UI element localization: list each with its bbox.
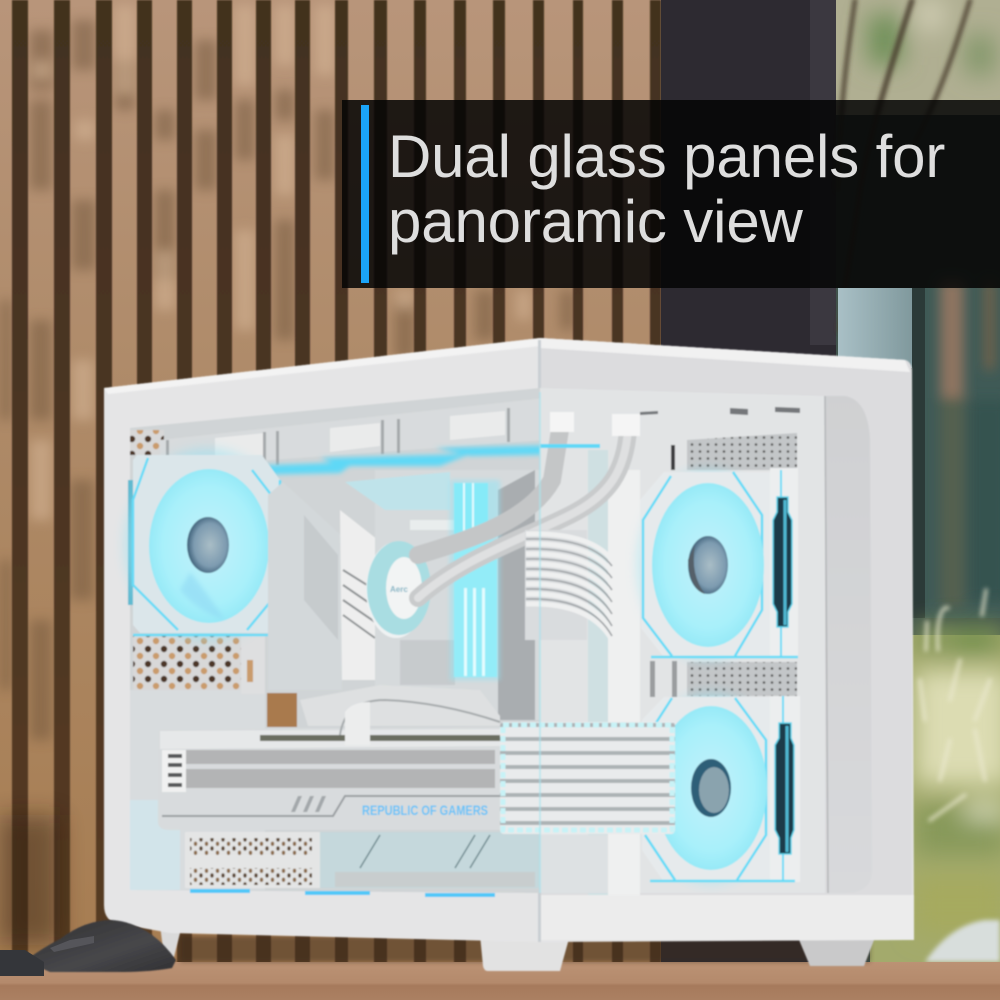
background: dark column — [661, 0, 838, 965]
headline — [388, 123, 945, 255]
front-right fan lower — [641, 693, 800, 883]
PSU-side cable bundle — [525, 530, 612, 640]
left window interior — [130, 388, 540, 893]
top fan row with blue glow — [160, 398, 600, 475]
accent bar — [361, 105, 369, 283]
RGB strip handles — [773, 470, 794, 880]
glass corner highlight — [539, 392, 541, 893]
rear perforated grills — [650, 433, 797, 697]
expansion slots under GPU — [185, 832, 608, 893]
AIO pump block: Aerc — [390, 585, 408, 594]
side inner panel — [825, 396, 872, 893]
left intake fan — [125, 449, 289, 641]
front-right fan top — [638, 468, 798, 660]
AIO tubes — [418, 412, 640, 598]
graphics card: REPUBLIC OF GAMERS — [362, 802, 488, 818]
table top — [0, 962, 1000, 1000]
case feet — [160, 925, 876, 971]
headline: Dual glass panels for — [388, 123, 945, 190]
right window interior — [540, 388, 825, 895]
PC case body — [104, 338, 914, 942]
RAM sticks with cyan glow — [450, 480, 500, 680]
CPU shroud panel — [268, 482, 378, 690]
background: grass and shrubs — [870, 590, 1000, 965]
bottom cyan light strips — [190, 889, 495, 897]
caption banner — [342, 100, 1000, 288]
background: wood slat wall — [0, 0, 662, 1000]
GPU end cap with LED dots — [500, 722, 675, 834]
motherboard — [300, 470, 540, 726]
keyboard corner — [0, 950, 44, 976]
AIO pump block — [366, 541, 431, 638]
shadow under case — [180, 936, 870, 962]
graphics card — [158, 700, 503, 830]
headline: panoramic view — [388, 188, 803, 255]
wireless mouse — [25, 920, 176, 972]
background: blurred garden through window — [836, 0, 1000, 965]
